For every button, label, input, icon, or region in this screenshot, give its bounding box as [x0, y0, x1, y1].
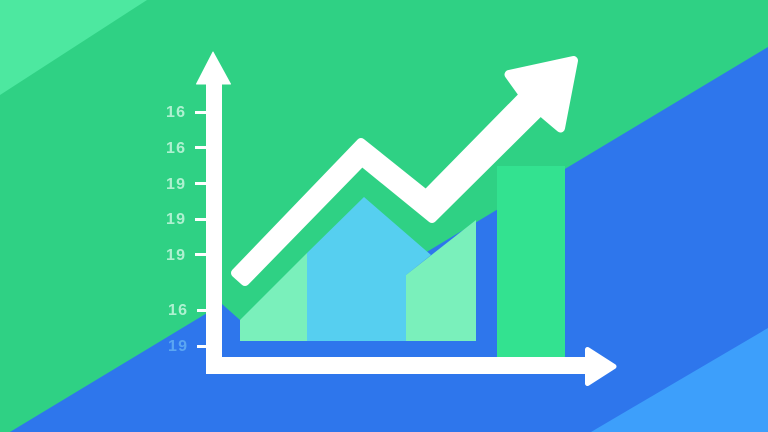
- y axis tick labels: 19: [166, 211, 186, 228]
- y axis tick marks: [195, 111, 207, 348]
- bar: tall green: [497, 166, 565, 358]
- y axis tick labels: 16: [166, 140, 186, 157]
- area segment: right light green: [406, 220, 476, 341]
- axes with arrowheads: [196, 52, 614, 384]
- y axis tick labels: 19: [168, 338, 188, 355]
- y axis tick labels: 19: [166, 247, 186, 264]
- area segment: centre light blue: [307, 197, 431, 341]
- y axis tick labels: 16: [168, 302, 188, 319]
- trend arrow: [236, 60, 574, 282]
- background: light green corner: [0, 0, 147, 95]
- area segment: left light green: [240, 253, 307, 341]
- y axis arrow: [196, 52, 230, 374]
- background: light blue corner: [591, 328, 768, 432]
- chart: area segments and bar: [240, 166, 565, 358]
- y axis tick labels: [166, 104, 188, 355]
- y axis tick labels: 19: [166, 176, 186, 193]
- x axis arrow: [206, 350, 614, 384]
- y axis tick labels: 16: [166, 104, 186, 121]
